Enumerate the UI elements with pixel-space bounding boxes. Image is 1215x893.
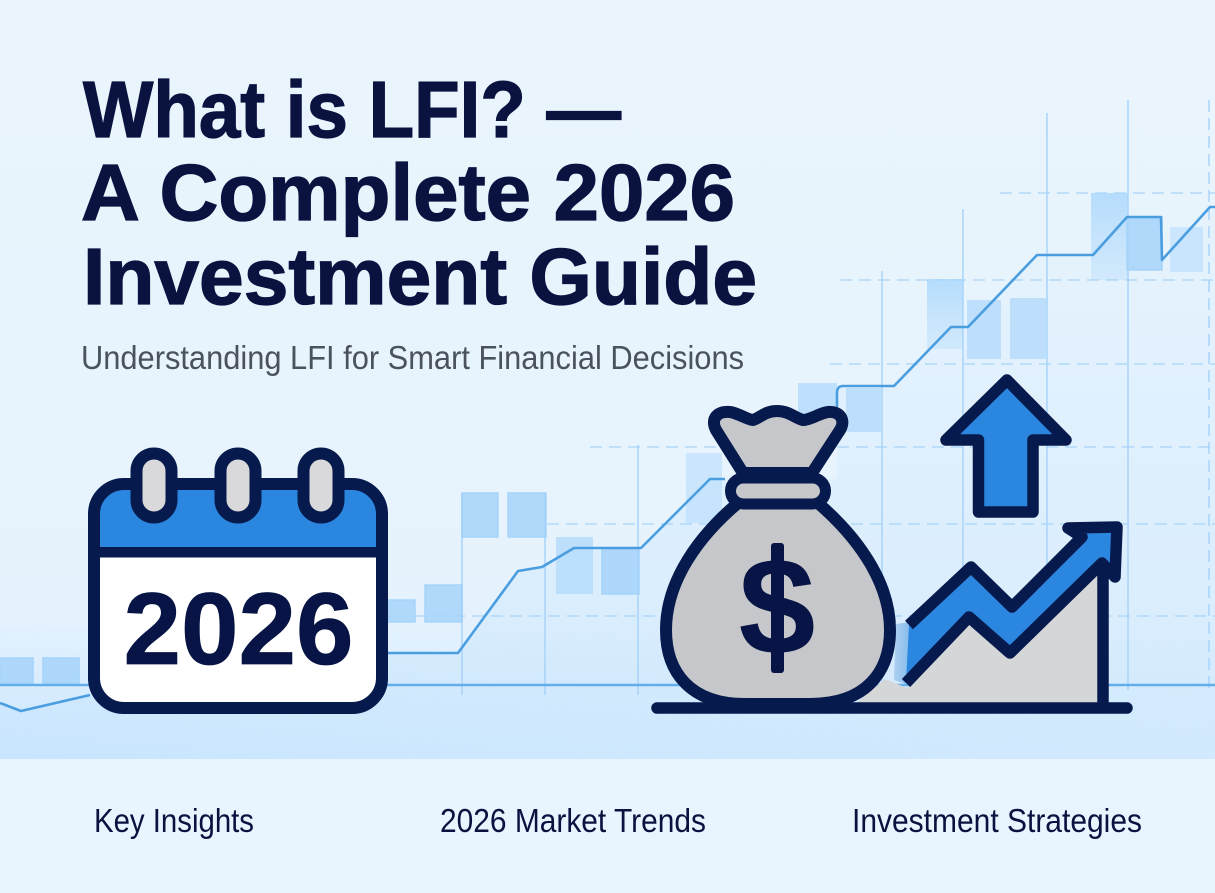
topic: market trends: 2026 Market Trends: [440, 802, 706, 839]
dollar sign: $: [739, 530, 815, 684]
title: A Complete 2026: [81, 148, 735, 237]
title: Investment Guide: [83, 232, 757, 321]
subtitle: Understanding LFI for Smart Financial Decisions: [81, 339, 744, 376]
calendar year: 2026: [124, 572, 354, 686]
icon: money bag: [666, 411, 890, 704]
icon: up arrow: [946, 380, 1066, 512]
topic: investment strategies: Investment Strategies: [852, 802, 1142, 839]
panel: bottom topics: [0, 759, 1215, 893]
icon: growth chart arrow: [855, 527, 1117, 706]
topic: key insights: Key Insights: [94, 802, 254, 839]
dollar bar: [771, 543, 784, 673]
ground line: [657, 702, 1127, 714]
background line chart: [0, 100, 1215, 759]
title: What is LFI? —: [83, 65, 621, 154]
title: [81, 65, 757, 321]
icon: calendar 2026: [94, 454, 382, 708]
